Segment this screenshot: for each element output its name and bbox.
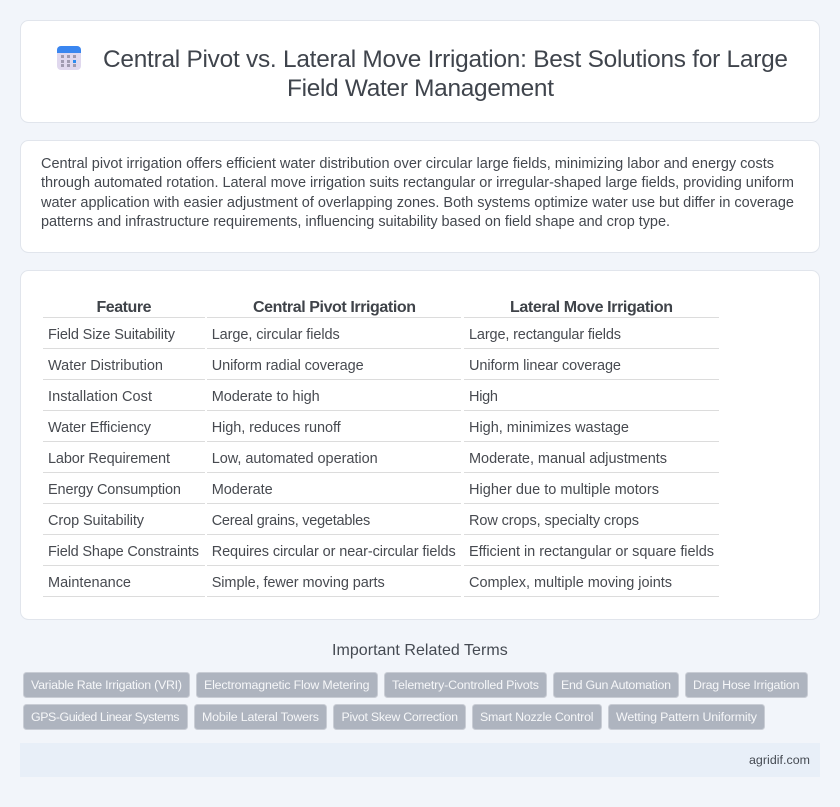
icon: calendar: [57, 46, 81, 70]
column: central pivot irrigation: Cereal grains, vegetables: [212, 513, 370, 529]
table header: Central Pivot Irrigation: [253, 299, 416, 316]
table header: Lateral Move Irrigation: [510, 299, 673, 316]
column: central pivot irrigation: Low, automated operation: [212, 451, 378, 467]
footer bar: [20, 743, 820, 777]
column: feature: Water Distribution: [48, 358, 163, 374]
panel: summary text: patterns and infrastructure requirements, influencing suitability based on field shape and crop type.: [41, 214, 670, 230]
column: central pivot irrigation: Simple, fewer moving parts: [212, 575, 385, 591]
title: Central Pivot vs. Lateral Move Irrigation: Best Solutions for Large: [103, 46, 788, 73]
related term tags: Electromagnetic Flow Metering: [204, 678, 370, 692]
panel: summary text: water application with easier adjustment of overlapping zones. Both systems optimize water use but differ in coverage: [40, 195, 794, 211]
column: lateral move irrigation: Moderate, manual adjustments: [469, 451, 667, 467]
panel: summary text: Central pivot irrigation offers efficient water distribution over circular large fields, minimizing labor and energy costs: [41, 156, 774, 172]
column: lateral move irrigation: Large, rectangular fields: [469, 327, 621, 343]
column: feature: Maintenance: [48, 575, 131, 591]
column: lateral move irrigation: Higher due to multiple motors: [469, 482, 659, 498]
column: central pivot irrigation: Moderate to high: [212, 389, 320, 405]
table header: [96, 299, 673, 316]
column: lateral move irrigation: Efficient in rectangular or square fields: [469, 544, 714, 560]
related term tags: End Gun Automation: [561, 678, 671, 692]
heading: important related terms: Important Related Terms: [332, 642, 508, 659]
column: feature: Crop Suitability: [48, 513, 145, 529]
related term tags: Mobile Lateral Towers: [202, 710, 319, 724]
title: [103, 46, 788, 102]
panel: title card: [20, 20, 820, 122]
column: lateral move irrigation: High, minimizes wastage: [469, 420, 629, 436]
column: central pivot irrigation: Uniform radial coverage: [212, 358, 364, 374]
related term tags: [24, 672, 808, 730]
footer bar: agridif.com: [749, 753, 810, 767]
column: central pivot irrigation: Moderate: [212, 482, 273, 498]
related term tags: GPS-Guided Linear Systems: [31, 710, 180, 724]
related term tags: Wetting Pattern Uniformity: [616, 710, 758, 724]
column: feature: Field Shape Constraints: [48, 544, 199, 560]
column: central pivot irrigation: Requires circular or near-circular fields: [212, 544, 456, 560]
column: feature: [48, 327, 199, 591]
related term tags: Smart Nozzle Control: [480, 710, 594, 724]
column: feature: Water Efficiency: [48, 420, 152, 436]
table header: Feature: [96, 299, 152, 316]
column: feature: Labor Requirement: [48, 451, 170, 467]
related term tags: Drag Hose Irrigation: [693, 678, 800, 692]
column: feature: Energy Consumption: [48, 482, 181, 498]
column: feature: Installation Cost: [48, 389, 152, 405]
column: lateral move irrigation: High: [469, 389, 498, 405]
column: central pivot irrigation: Large, circular fields: [212, 327, 340, 343]
related term tags: Variable Rate Irrigation (VRI): [31, 678, 182, 692]
title: Field Water Management: [287, 75, 554, 102]
panel: summary text: [20, 140, 820, 252]
column: lateral move irrigation: Complex, multiple moving joints: [469, 575, 672, 591]
column: lateral move irrigation: Row crops, specialty crops: [469, 513, 639, 529]
column: feature: Field Size Suitability: [48, 327, 176, 343]
panel: summary text: through automated rotation. Lateral move irrigation suits rectangular or irregular-shaped large fields, providing uniform: [41, 175, 794, 191]
column: central pivot irrigation: High, reduces runoff: [212, 420, 342, 436]
panel: comparison table: [20, 270, 820, 620]
column: lateral move irrigation: Uniform linear coverage: [469, 358, 621, 374]
column: lateral move irrigation: [469, 327, 714, 591]
column: central pivot irrigation: [212, 327, 456, 591]
related term tags: Telemetry-Controlled Pivots: [392, 678, 539, 692]
related term tags: Pivot Skew Correction: [342, 710, 458, 724]
